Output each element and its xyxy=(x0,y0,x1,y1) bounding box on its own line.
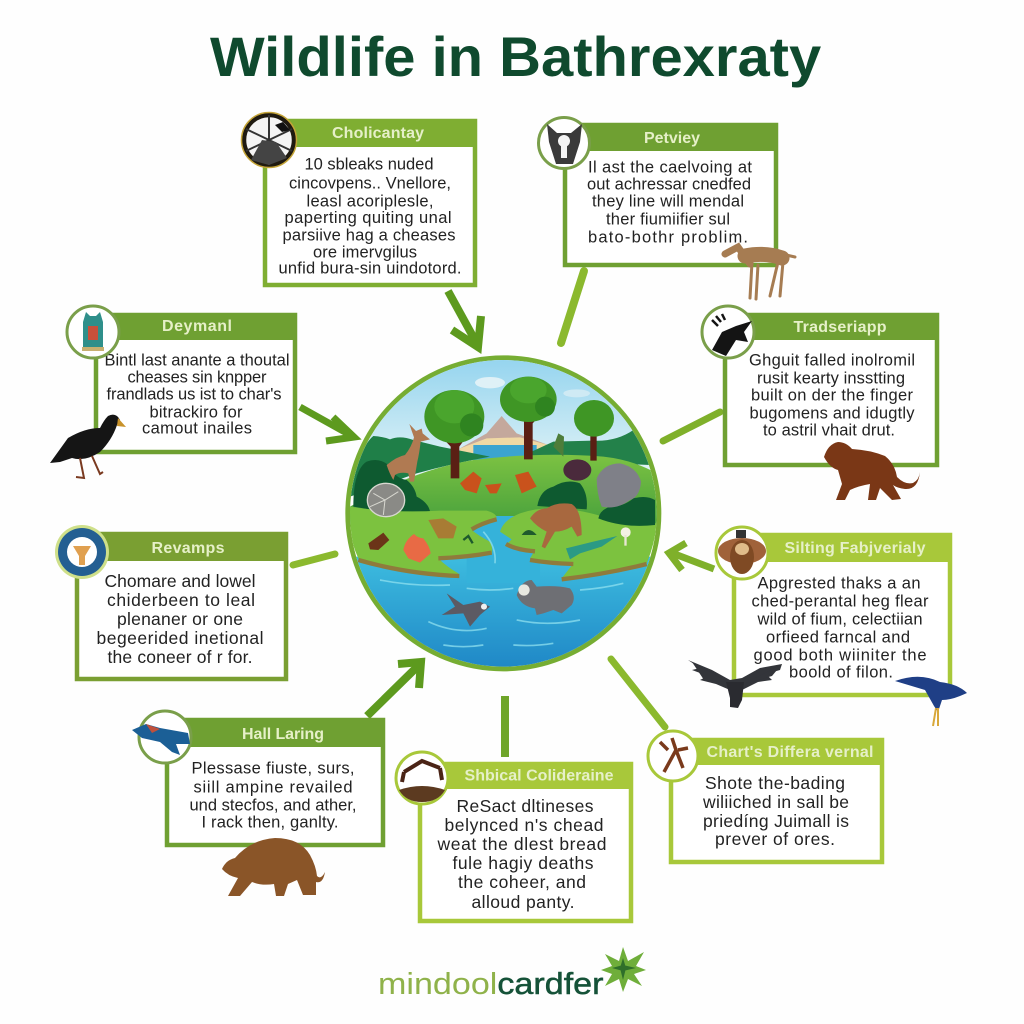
panel: Silting Fabjverialy: ched-perantal heg flear xyxy=(752,592,929,610)
panel: Deymanl: Deymanl xyxy=(162,318,232,335)
panel: Chart's Differa vernal: prever of ores. xyxy=(715,829,835,849)
panel: Tradseriapp: rusit kearty insstting xyxy=(757,370,905,388)
panel: Tradseriapp: built on der the finger xyxy=(751,386,914,404)
panel: Chart's Differa vernal: Chart's Differa vernal xyxy=(706,744,874,761)
left bank xyxy=(349,507,497,577)
icon: emblem xyxy=(55,525,109,579)
panel: Cholicantay xyxy=(263,119,477,285)
panel: Silting Fabjverialy: orfieed farncal and xyxy=(766,628,910,646)
panel: Chart's Differa vernal: wiliiched in sall be xyxy=(702,792,849,812)
panel: Petviey xyxy=(563,123,778,265)
right bank xyxy=(500,508,657,578)
illustration: deer xyxy=(725,247,795,299)
panel: Revamps: chiderbeen to leal xyxy=(107,590,255,610)
illustration: eagle xyxy=(688,660,782,708)
panel: Silting Fabjverialy: Silting Fabjverialy xyxy=(784,540,926,557)
panel: Cholicantay: parsiive hag a cheases xyxy=(282,226,456,244)
connector: Tradseriapp xyxy=(663,412,720,441)
panel: Cholicantay: 10 sbleaks nuded xyxy=(304,156,434,174)
panel: Chart's Differa vernal xyxy=(669,738,884,862)
logo: mindoolcardfer xyxy=(378,966,604,1001)
arrow: Deymanl to centre xyxy=(300,407,354,441)
panel: Revamps xyxy=(75,532,288,679)
panel: Petviey: Il ast the caelvoing at xyxy=(588,158,752,176)
panel: Cholicantay: paperting quiting unal xyxy=(284,209,452,227)
icon: dancing figure xyxy=(648,731,698,781)
panel: Shbical Colideraine: the coheer, and xyxy=(458,872,586,892)
panel: Tradseriapp xyxy=(723,313,939,465)
panel: Chart's Differa vernal: Shote the-bading xyxy=(705,773,845,793)
arrows and connectors xyxy=(293,271,720,757)
panel: Shbical Colideraine: Shbical Colideraine xyxy=(464,768,614,784)
panel: Petviey: bato-bothr problim. xyxy=(588,228,748,246)
icon: nest and branches xyxy=(396,752,448,804)
logo xyxy=(378,947,646,1001)
panel: Hall Laring: I rack then, ganlty. xyxy=(202,814,338,832)
icon: animal head xyxy=(538,118,590,168)
illustration: brown bear xyxy=(222,838,325,896)
panel: Petviey: ther fiumiifier sul xyxy=(606,210,730,228)
panel: Deymanl: bitrackiro for xyxy=(150,404,243,422)
illustration: black bird xyxy=(50,415,126,478)
panel: Revamps: plenaner or one xyxy=(117,609,243,629)
trees xyxy=(424,377,614,478)
icon: green star leaf xyxy=(601,947,646,992)
icon: wheel and bird xyxy=(242,112,296,168)
icon: monkey xyxy=(716,527,768,579)
panel: Deymanl xyxy=(94,313,297,452)
panel: Deymanl: camout inailes xyxy=(142,420,252,438)
arrow: Hall Laring to centre xyxy=(367,662,421,716)
panel: Revamps: Chomare and lowel xyxy=(104,571,256,591)
illustration: blue bird xyxy=(895,677,967,726)
connector: Revamps xyxy=(293,554,335,565)
panel: Hall Laring xyxy=(165,718,385,845)
panel: Hall Laring: Hall Laring xyxy=(242,726,324,743)
panel: Hall Laring: siill ampine revailed xyxy=(194,778,352,796)
panel: Tradseriapp: Ghguit falled inolromil xyxy=(749,352,915,370)
panel: Shbical Colideraine: belynced n's chead xyxy=(444,815,604,835)
panel: Petviey: Petviey xyxy=(644,130,700,147)
panel: Revamps: the coneer of r for. xyxy=(108,647,252,667)
panel: Hall Laring: und stecfos, and ather, xyxy=(190,796,356,814)
panel: Cholicantay: unfid bura-sin uindotord. xyxy=(278,260,462,278)
panel: Silting Fabjverialy: wild of fium, celectiian xyxy=(756,610,922,628)
panel: Cholicantay: ore imervgilus xyxy=(313,244,417,262)
panel: Chart's Differa vernal: priedíng Juimall is xyxy=(703,811,849,831)
panel: Tradseriapp: to astril vhait drut. xyxy=(763,422,895,440)
panel: Petviey: out achressar cnedfed xyxy=(587,176,751,194)
title: Wildlife in Bathrexraty xyxy=(210,26,822,89)
animals in scene xyxy=(367,424,641,627)
arrow: Cholicantay to centre xyxy=(448,291,481,347)
illustration: brown bear xyxy=(824,442,920,500)
panel: Cholicantay: leasl acoriplesle, xyxy=(306,192,434,210)
panel: Shbical Colideraine: fule hagiy deaths xyxy=(452,853,594,873)
panel: Silting Fabjverialy: good both wiiniter the xyxy=(754,646,926,664)
panel: Revamps: begeerided inetional xyxy=(96,628,264,648)
panel: Tradseriapp: bugomens and idugtly xyxy=(750,404,915,422)
panel: Cholicantay: cincovpens.. Vnellore, xyxy=(289,174,451,192)
panel: Deymanl: Bintl last anante a thoutal xyxy=(104,352,290,370)
panel: Silting Fabjverialy: Apgrested thaks a an xyxy=(758,574,920,592)
panel: Hall Laring: Plessase fiuste, surs, xyxy=(192,760,354,778)
panel: Cholicantay: Cholicantay xyxy=(332,125,424,142)
connector: Shbical Colideraine xyxy=(501,696,509,757)
water xyxy=(356,556,650,667)
central ecosystem illustration xyxy=(340,350,670,680)
panel: Shbical Colideraine xyxy=(418,762,633,921)
panel: Petviey: they line will mendal xyxy=(592,192,744,210)
panel: Shbical Colideraine: weat the dlest bread xyxy=(436,834,606,854)
panel: Tradseriapp: Tradseriapp xyxy=(794,319,887,336)
arrow: Silting Fabjverialy to centre xyxy=(669,543,714,570)
panel: Shbical Colideraine: alloud panty. xyxy=(472,892,574,912)
panel: Deymanl: cheases sin knpper xyxy=(128,368,267,386)
icon: black bird in flight xyxy=(702,306,754,358)
panel: Silting Fabjverialy: boold of filon. xyxy=(789,664,893,682)
panel: Shbical Colideraine: ReSact dltineses xyxy=(456,796,594,816)
connector: Petviey xyxy=(561,271,584,343)
icon: blue fish xyxy=(132,711,191,763)
panel: Deymanl: frandlads us ist to char's xyxy=(106,386,282,404)
connector: Chart's Differa vernal xyxy=(611,659,665,727)
panel: Silting Fabjverialy xyxy=(732,533,952,695)
icon: bottle xyxy=(67,306,119,358)
panel: Revamps: Revamps xyxy=(152,540,225,557)
